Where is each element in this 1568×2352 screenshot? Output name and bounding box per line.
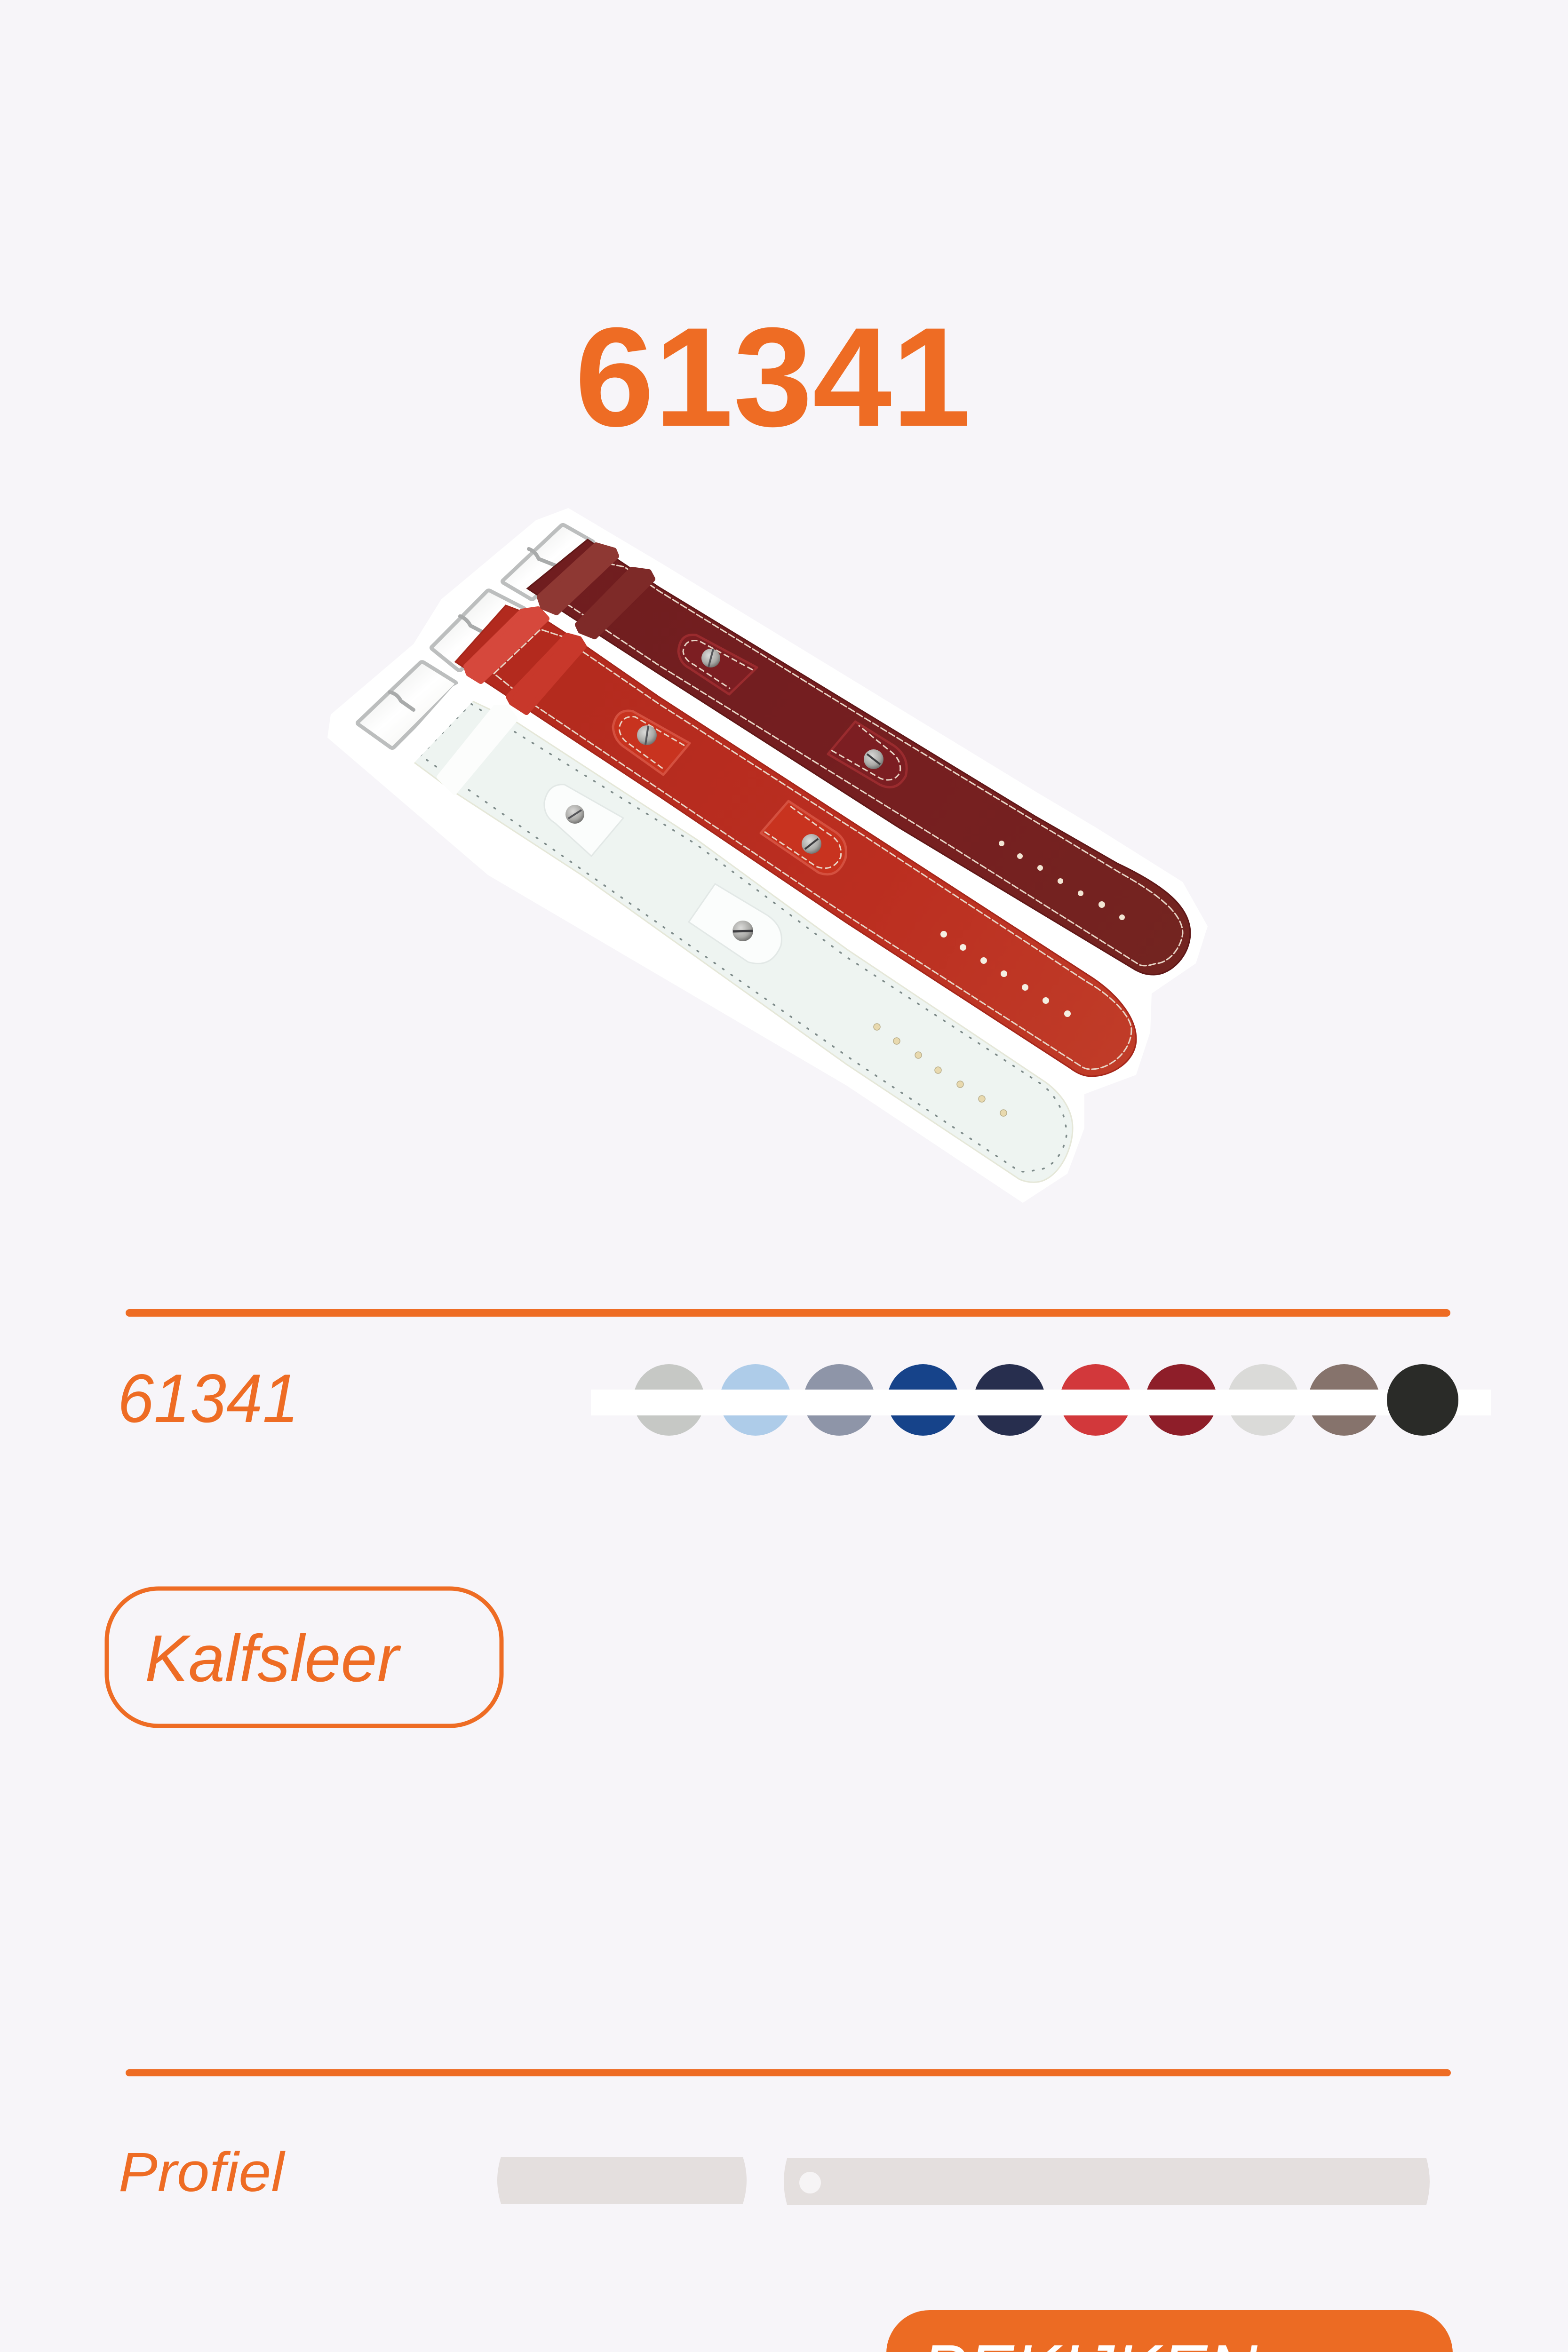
product photo: three watch straps	[327, 508, 1208, 1203]
strap: red	[431, 590, 1136, 1076]
divider: upper	[126, 1309, 1450, 1317]
strap: dark burgundy	[502, 525, 1190, 975]
profile label: Profiel	[119, 2141, 286, 2203]
tag outline	[107, 1589, 501, 1726]
divider: lower	[126, 2069, 1451, 2076]
swatch circles	[633, 1364, 1380, 1436]
button: bekijken	[886, 2310, 1453, 2352]
profile shape: long with hole	[784, 2158, 1430, 2205]
title: 61341	[575, 298, 971, 456]
tag text: Kalfsleer	[145, 1621, 401, 1695]
black swatch	[1387, 1364, 1458, 1436]
profile shape: short	[497, 2157, 747, 2204]
model number label: 61341	[118, 1360, 299, 1437]
white band over swatches	[591, 1390, 1491, 1415]
material tag	[107, 1589, 501, 1726]
strap: white	[358, 662, 1073, 1182]
white cut-out halo	[327, 508, 1208, 1203]
colour swatches	[591, 1364, 1491, 1436]
